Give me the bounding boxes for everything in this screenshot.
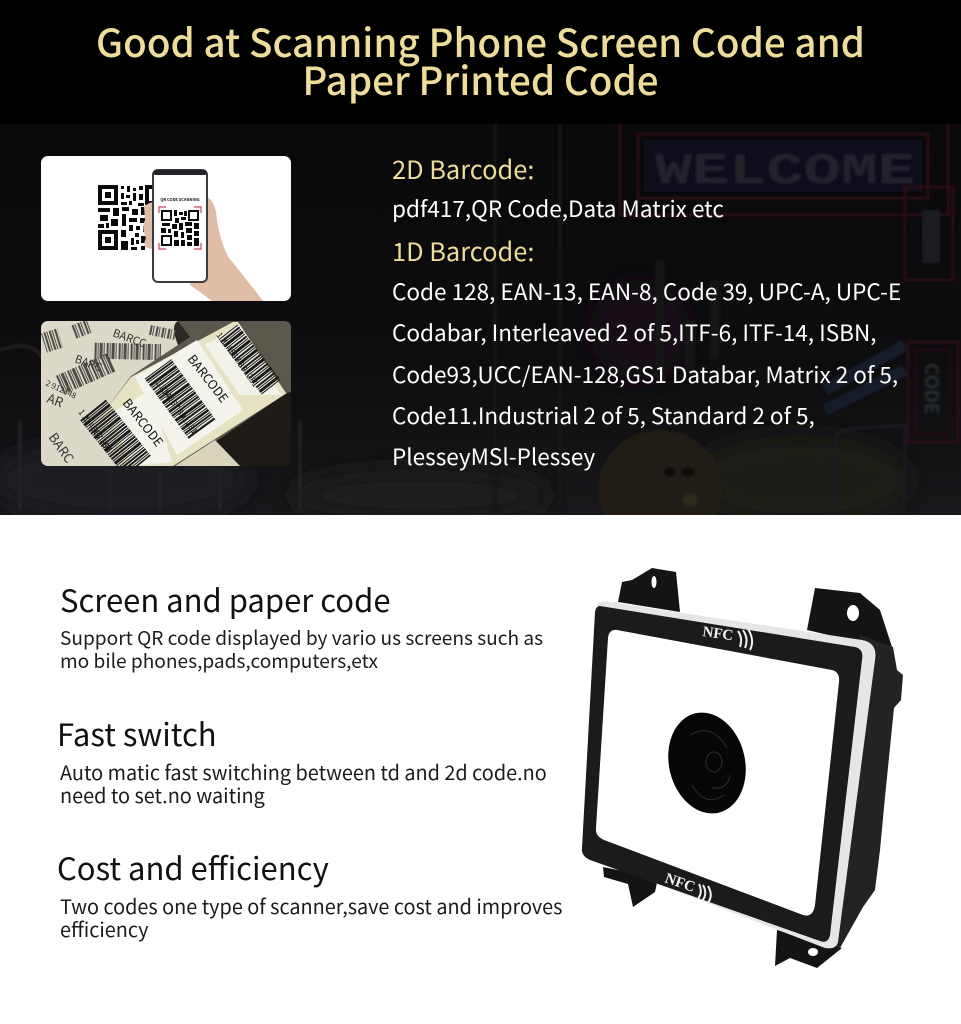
white window	[596, 630, 839, 916]
feature: cost and efficiency	[57, 844, 562, 943]
feature text: Support QR code displayed by vario us screens such as	[60, 623, 543, 651]
label text: 1 234567 891231	[153, 377, 201, 437]
label text	[76, 330, 262, 455]
scan brackets	[159, 207, 201, 249]
side body	[820, 635, 903, 948]
2D list: pdf417,QR Code,Data Matrix etc	[392, 192, 724, 224]
mounting tabs	[603, 568, 893, 968]
NFC bottom label: NFC	[663, 871, 697, 896]
background label text: 2 912348	[44, 378, 79, 402]
background labels	[41, 321, 178, 466]
NFC bottom label	[663, 871, 711, 904]
feature text	[60, 891, 562, 943]
NFC top label	[701, 624, 752, 650]
white strip	[590, 601, 875, 948]
tab holes	[652, 576, 859, 956]
title: Good at Scanning Phone Screen Code and	[96, 12, 865, 68]
label barcodes	[93, 332, 272, 466]
feature heading: Fast switch	[57, 710, 217, 755]
title	[96, 12, 865, 106]
1D list: Code11.Industrial 2 of 5, Standard 2 of 5,	[392, 399, 815, 431]
label text: BARCODE	[119, 394, 169, 450]
phone	[153, 170, 207, 282]
lens	[659, 705, 755, 821]
feature text: efficiency	[60, 914, 148, 943]
label strip	[103, 322, 291, 466]
welcome sign: WELCOME	[655, 147, 915, 197]
image: barcode labels	[41, 321, 291, 466]
background label text: BARC	[73, 351, 104, 375]
title: Paper Printed Code	[302, 50, 659, 106]
side sign upper	[905, 187, 953, 280]
1D list: Codabar, Interleaved 2 of 5,ITF-6, ITF-14, ISBN,	[392, 316, 877, 348]
1D list: Code93,UCC/EAN-128,GS1 Databar, Matrix 2 of 5,	[392, 358, 898, 390]
feature: fast switch	[57, 710, 547, 809]
background barcodes	[44, 326, 175, 385]
plush toy	[598, 430, 722, 550]
front frame	[582, 606, 862, 942]
lower dark area	[180, 390, 291, 466]
screen QR	[161, 210, 199, 246]
printed QR code	[98, 185, 165, 250]
background label text	[44, 325, 149, 466]
feature text: Two codes one type of scanner,save cost and improves	[60, 891, 562, 920]
title banner	[0, 0, 961, 124]
NFC top label: NFC	[701, 624, 734, 644]
feature text	[60, 757, 547, 809]
background label text: AR	[45, 388, 66, 411]
1D list: Code 128, EAN-13, EAN-8, Code 39, UPC-A, UPC-E	[392, 275, 901, 307]
feature heading: Cost and efficiency	[57, 844, 329, 889]
label text: BARCODE	[184, 350, 234, 406]
white labels	[108, 325, 281, 466]
product: NFC scanner module	[582, 568, 903, 968]
text block: barcode types	[392, 151, 901, 472]
heading: 1D barcode: 1D Barcode:	[392, 233, 534, 269]
background label text: BARCC	[111, 325, 149, 352]
1D list: PlesseyMSl-Plessey	[392, 440, 595, 472]
panel: dark arcade background	[0, 124, 961, 515]
label text: 1 234567 891	[76, 407, 115, 455]
background label text: BARC	[45, 428, 79, 466]
heading: 2D barcode: 2D Barcode:	[392, 151, 534, 187]
hand	[143, 198, 263, 301]
welcome sign	[620, 124, 948, 215]
feature text: Auto matic fast switching between td and 2d code.no	[60, 757, 547, 786]
screen heading: QR CODE SCANNING	[160, 197, 200, 203]
image: phone scanning QR code	[41, 156, 291, 301]
label text: 1 234567 891231	[214, 330, 262, 390]
feature text: need to set.no waiting	[60, 780, 265, 809]
feature text: mo bile phones,pads,computers,etx	[60, 646, 378, 674]
feature heading: Screen and paper code	[60, 576, 390, 621]
side sign lower: CODE	[919, 363, 946, 415]
side sign lower	[908, 342, 958, 442]
feature: screen and paper code	[60, 576, 543, 674]
feature text	[60, 623, 543, 674]
1D list	[392, 275, 901, 472]
